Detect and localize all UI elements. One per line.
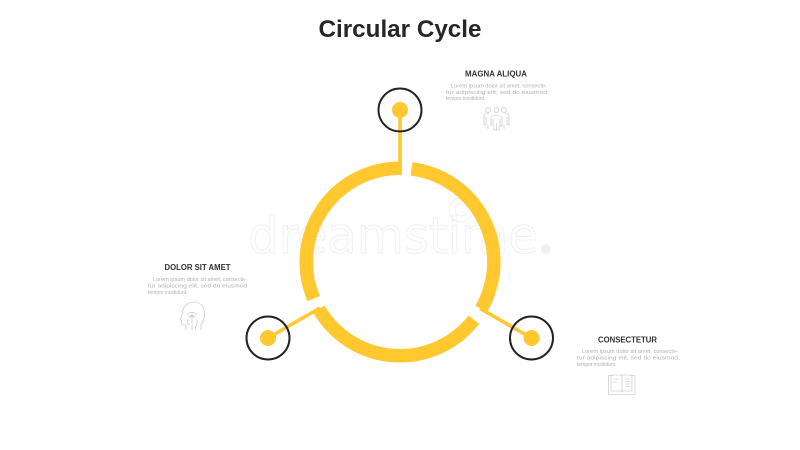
icon: open book bbox=[608, 375, 635, 394]
text block: Consectetur: CONSECTETUR bbox=[598, 336, 657, 344]
text block: Consectetur: Lorem ipsum dolor sit amet, consecte- bbox=[582, 349, 678, 355]
title: Circular Cycle bbox=[318, 16, 482, 43]
text block: Magna Aliqua: tempor incididunt. bbox=[446, 96, 485, 102]
text block: Dolor Sit Amet: tur adipiscing elit, sed do eiusmod bbox=[148, 284, 247, 290]
text block: Magna Aliqua: Lorem ipsum dolor sit amet, consecte- bbox=[451, 84, 547, 90]
text block: Consectetur: tur adipiscing elit, sed do eiusmod bbox=[577, 356, 678, 362]
watermark: dreamstime bbox=[248, 207, 538, 265]
text block: Consectetur: tempor incididunt. bbox=[577, 362, 616, 368]
step 2 node: right bbox=[480, 308, 553, 360]
segmented yellow ring bbox=[306, 168, 494, 356]
text block: Dolor Sit Amet bbox=[148, 263, 247, 296]
text block: Dolor Sit Amet: Lorem ipsum dolor sit amet, consecte- bbox=[153, 277, 247, 283]
icon: people bbox=[484, 108, 509, 130]
icon: head with signal bbox=[180, 302, 204, 330]
text block: Dolor Sit Amet: tempor incididunt. bbox=[148, 290, 187, 296]
text block: Magna Aliqua: MAGNA ALIQUA bbox=[465, 70, 527, 78]
text block: Magna Aliqua: tur adipiscing elit, sed do eiusmod bbox=[446, 90, 547, 96]
text block: Magna Aliqua bbox=[446, 70, 547, 102]
text block: Dolor Sit Amet: DOLOR SIT AMET bbox=[164, 263, 231, 272]
step 1 node: top bbox=[378, 88, 422, 175]
text block: Consectetur bbox=[577, 336, 678, 368]
step 3 node: left bbox=[246, 308, 320, 360]
